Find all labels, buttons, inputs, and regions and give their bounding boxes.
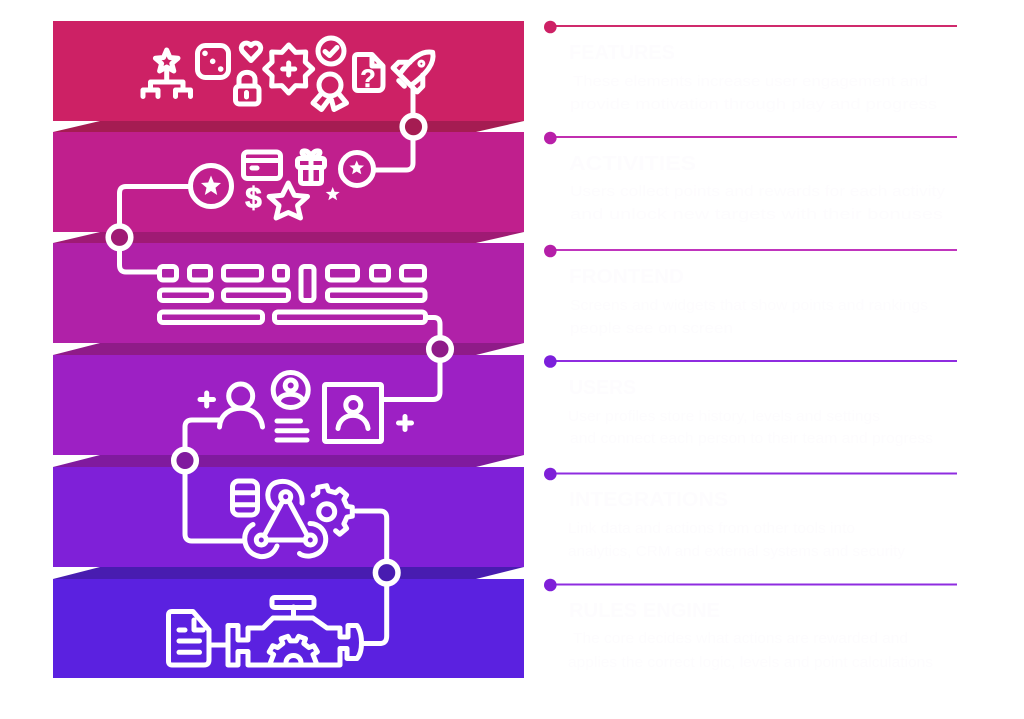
icon: database <box>232 481 258 515</box>
marker line <box>544 468 957 480</box>
body: User profiles store history, levels and settings <box>568 408 880 425</box>
icon: org tree with star <box>143 50 190 96</box>
stacked layer bands <box>53 21 524 678</box>
icon: gift box <box>298 151 324 184</box>
connector to engine <box>211 642 227 648</box>
fold 4 <box>53 455 524 467</box>
icon group: rules engine <box>168 598 362 665</box>
text block: integrations <box>544 468 957 560</box>
text block: activities <box>544 132 957 223</box>
marker line <box>544 579 957 591</box>
node 3 <box>429 338 451 360</box>
body: applies the correct logic, levels and point calculations <box>568 654 933 671</box>
band 4 <box>53 355 524 455</box>
icon: rocket <box>390 40 445 95</box>
body: analytics, CRM and external systems and security <box>568 543 906 560</box>
connector nodes <box>108 115 451 584</box>
icon group: text blocks <box>160 266 426 322</box>
icon: star token large <box>190 166 232 206</box>
body: Screens and widgets that show points and rankings <box>570 297 928 314</box>
marker line <box>544 245 957 257</box>
connector path <box>120 88 440 644</box>
icon: outline star <box>269 183 308 218</box>
heading: USERS <box>569 377 636 399</box>
body: These elements increase user engagement and <box>573 73 928 90</box>
heading: FEATURES <box>569 42 675 64</box>
heading: INTEGRATIONS <box>569 489 728 511</box>
icon: award ribbon <box>313 74 346 110</box>
icon: padlock <box>236 72 259 104</box>
icon: document <box>168 612 209 665</box>
icon: user in circle <box>273 372 308 408</box>
heading: FRONTEND <box>569 266 684 288</box>
body: The core decides what actions are rewarded and <box>573 630 908 647</box>
marker line <box>544 132 957 144</box>
text block: rules engine <box>544 579 957 671</box>
icon: user <box>220 384 262 427</box>
icon: document with question mark: ? <box>360 65 376 93</box>
icon: star token small <box>340 152 374 186</box>
icon: small star <box>326 187 340 200</box>
icon: gear <box>313 486 352 534</box>
text block: frontend <box>544 245 957 337</box>
band 5 <box>53 467 524 567</box>
marker line <box>544 355 957 368</box>
body: provide motivation through play and progress <box>570 96 937 113</box>
band 3 <box>53 243 524 343</box>
text block: users <box>544 355 957 447</box>
icon: profile card <box>324 384 382 442</box>
band 6 <box>53 579 524 678</box>
icon: octagram badge with plus <box>265 45 313 93</box>
fold 1 <box>53 121 524 132</box>
icon: heart <box>241 43 261 60</box>
band 1 <box>53 21 524 121</box>
icon: dice <box>198 46 228 78</box>
node 2 <box>108 226 131 249</box>
icon group: integrations <box>232 481 352 557</box>
heading: RULES ENGINE <box>569 600 720 622</box>
band 2 <box>53 132 524 232</box>
fold 3 <box>53 343 524 355</box>
icon group: rewards <box>190 151 374 218</box>
icon: plus left <box>200 393 214 406</box>
icon: plus right <box>398 416 412 430</box>
marker line <box>544 21 957 33</box>
icon: triangle network <box>245 481 326 557</box>
body: Users collect points and rewards for each activity <box>570 183 946 200</box>
icon: engine block <box>228 598 362 665</box>
icon group: people <box>200 372 412 442</box>
icon: document with question mark <box>354 54 383 93</box>
node 5 <box>375 561 398 584</box>
icon: dollar sign: $ <box>245 182 262 215</box>
text block: features <box>544 21 957 113</box>
icon: list lines <box>277 421 307 440</box>
icon group: features <box>143 38 445 110</box>
icon: check circle <box>318 38 344 64</box>
fold 5 <box>53 567 524 579</box>
icon: credit card <box>244 152 280 178</box>
body: Link data and actions from other tools into <box>568 520 855 537</box>
body: and connect each person to their team and progress <box>570 430 933 447</box>
body: and unlock new targets with their bonuses <box>570 206 943 223</box>
node 1 <box>402 115 425 138</box>
heading: ACTIVITIES <box>569 153 696 175</box>
node 4 <box>174 449 196 472</box>
fold 2 <box>53 232 524 243</box>
body: people see on screen <box>570 320 733 337</box>
